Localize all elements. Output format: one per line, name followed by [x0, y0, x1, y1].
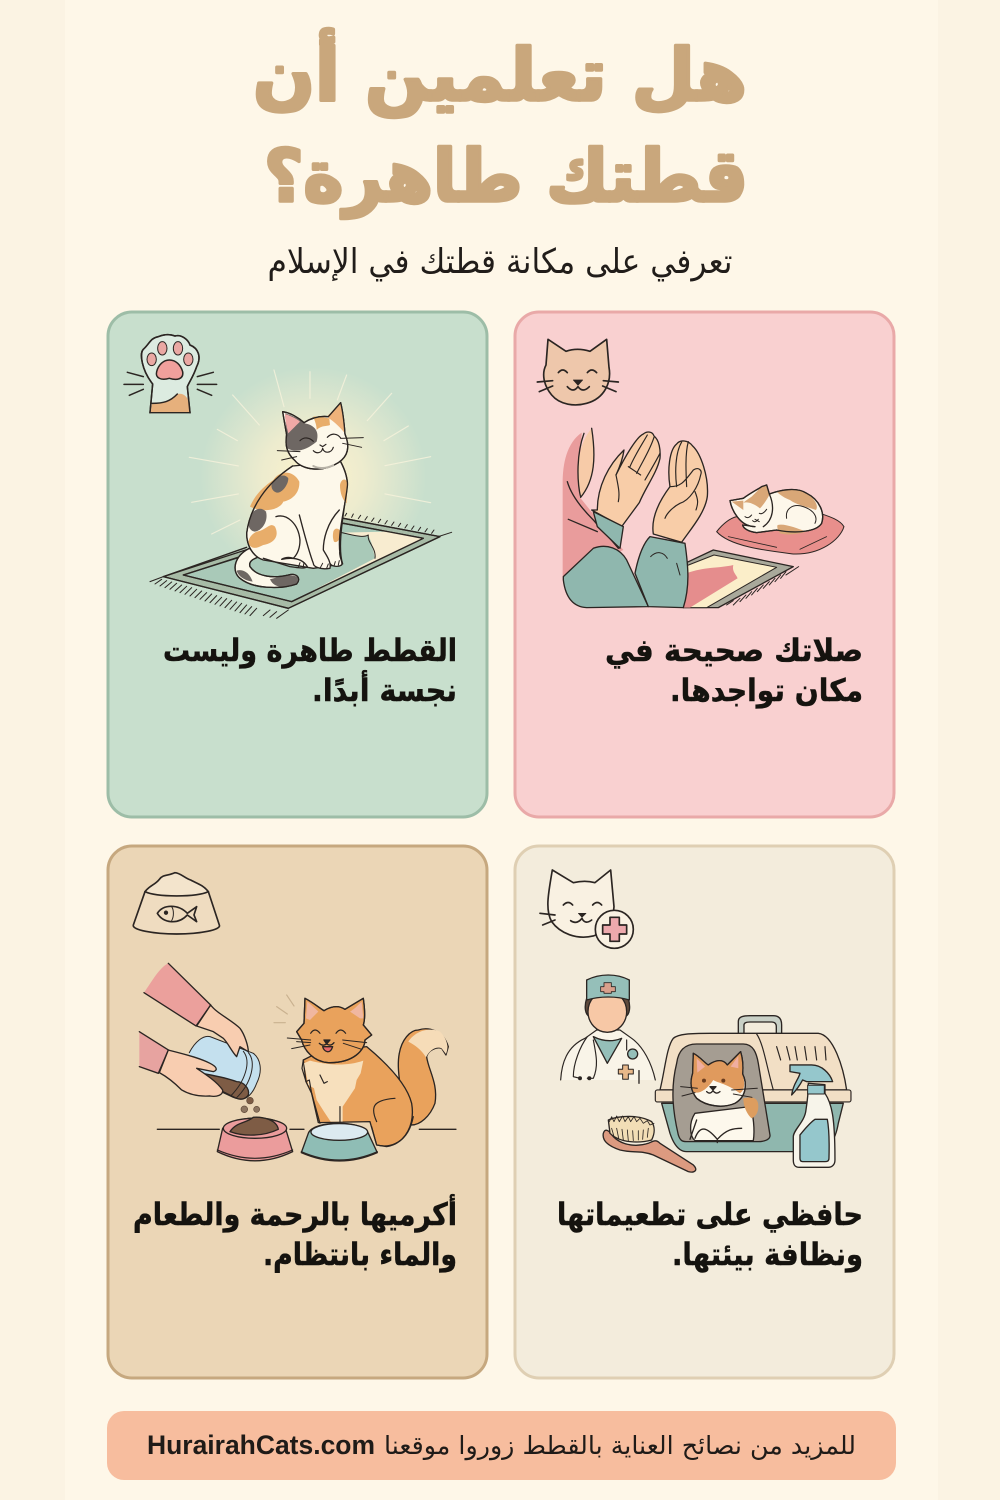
icon: food bowl with fish	[133, 873, 219, 934]
carrier base	[662, 1103, 843, 1152]
water bowl	[301, 1123, 377, 1161]
text: health and hygiene: حافظي على تطعيماتها	[557, 1197, 863, 1233]
head	[283, 403, 348, 469]
illustration: calico cat on prayer rug	[150, 367, 452, 618]
subtitle: تعرفي على مكانة قطتك في الإسلام	[268, 242, 732, 282]
panel: feed with mercy (tan)	[108, 846, 487, 1378]
icon: smiling cat face	[537, 339, 618, 405]
carrier door	[673, 1044, 770, 1142]
brush	[603, 1130, 696, 1172]
text: feed with mercy	[133, 1194, 457, 1273]
title	[253, 28, 748, 219]
vet	[561, 1030, 655, 1080]
carrier handle	[738, 1016, 782, 1033]
panel: pure cats (green)	[108, 312, 487, 817]
food bowl	[217, 1118, 293, 1161]
carrier top	[660, 1033, 847, 1090]
right hand	[653, 441, 708, 542]
garment	[563, 433, 623, 577]
illustration: praying hands with sleeping cat	[563, 428, 844, 608]
cat body	[303, 1047, 412, 1147]
left hand	[592, 432, 660, 527]
kibble	[247, 1097, 253, 1104]
tail	[235, 548, 299, 587]
text: feed with mercy: أكرميها بالرحمة والطعام	[133, 1194, 457, 1233]
text: pure cats: نجسة أبدًا.	[312, 670, 457, 709]
icon: cat face with medical cross	[540, 870, 633, 948]
text: prayer valid	[605, 633, 863, 709]
panel: prayer valid (pink)	[515, 312, 894, 817]
text: prayer valid: صلاتك صحيحة في	[605, 633, 863, 669]
title: قطتك طاهرة؟	[264, 134, 748, 219]
spray bottle	[793, 1083, 835, 1167]
text: health and hygiene	[557, 1197, 863, 1273]
text: pure cats	[163, 633, 457, 709]
text: prayer valid: مكان تواجدها.	[670, 673, 863, 709]
illustration: feeding an orange cat	[139, 963, 456, 1161]
rug	[683, 550, 793, 608]
jar	[189, 1036, 260, 1099]
footer text: HurairahCats.com	[147, 1430, 375, 1460]
icon: raised paw	[124, 335, 217, 413]
lower arm	[139, 1032, 168, 1073]
hands	[197, 1005, 248, 1057]
carrier cat	[691, 1107, 754, 1141]
text: feed with mercy: والماء بانتظام.	[263, 1237, 457, 1273]
panel: health and hygiene (cream)	[515, 846, 894, 1378]
text: pure cats: القطط طاهرة وليست	[163, 633, 457, 669]
footer banner	[107, 1411, 896, 1480]
text: health and hygiene: ونظافة بيئتها.	[672, 1237, 863, 1273]
body	[247, 462, 347, 568]
illustration: vet, carrier, brush and spray	[561, 975, 851, 1172]
upper arm	[144, 963, 211, 1026]
title: هل تعلمين أن	[253, 28, 747, 118]
pillow	[717, 513, 844, 554]
cat head	[297, 998, 372, 1063]
prayer rug	[163, 518, 440, 608]
cat tail	[398, 1029, 448, 1125]
sleeping cat	[730, 485, 823, 533]
sleeves	[593, 512, 623, 548]
footer text	[147, 1430, 856, 1461]
footer text: للمزيد من نصائح العناية بالقطط زوروا موقعنا	[384, 1431, 856, 1461]
